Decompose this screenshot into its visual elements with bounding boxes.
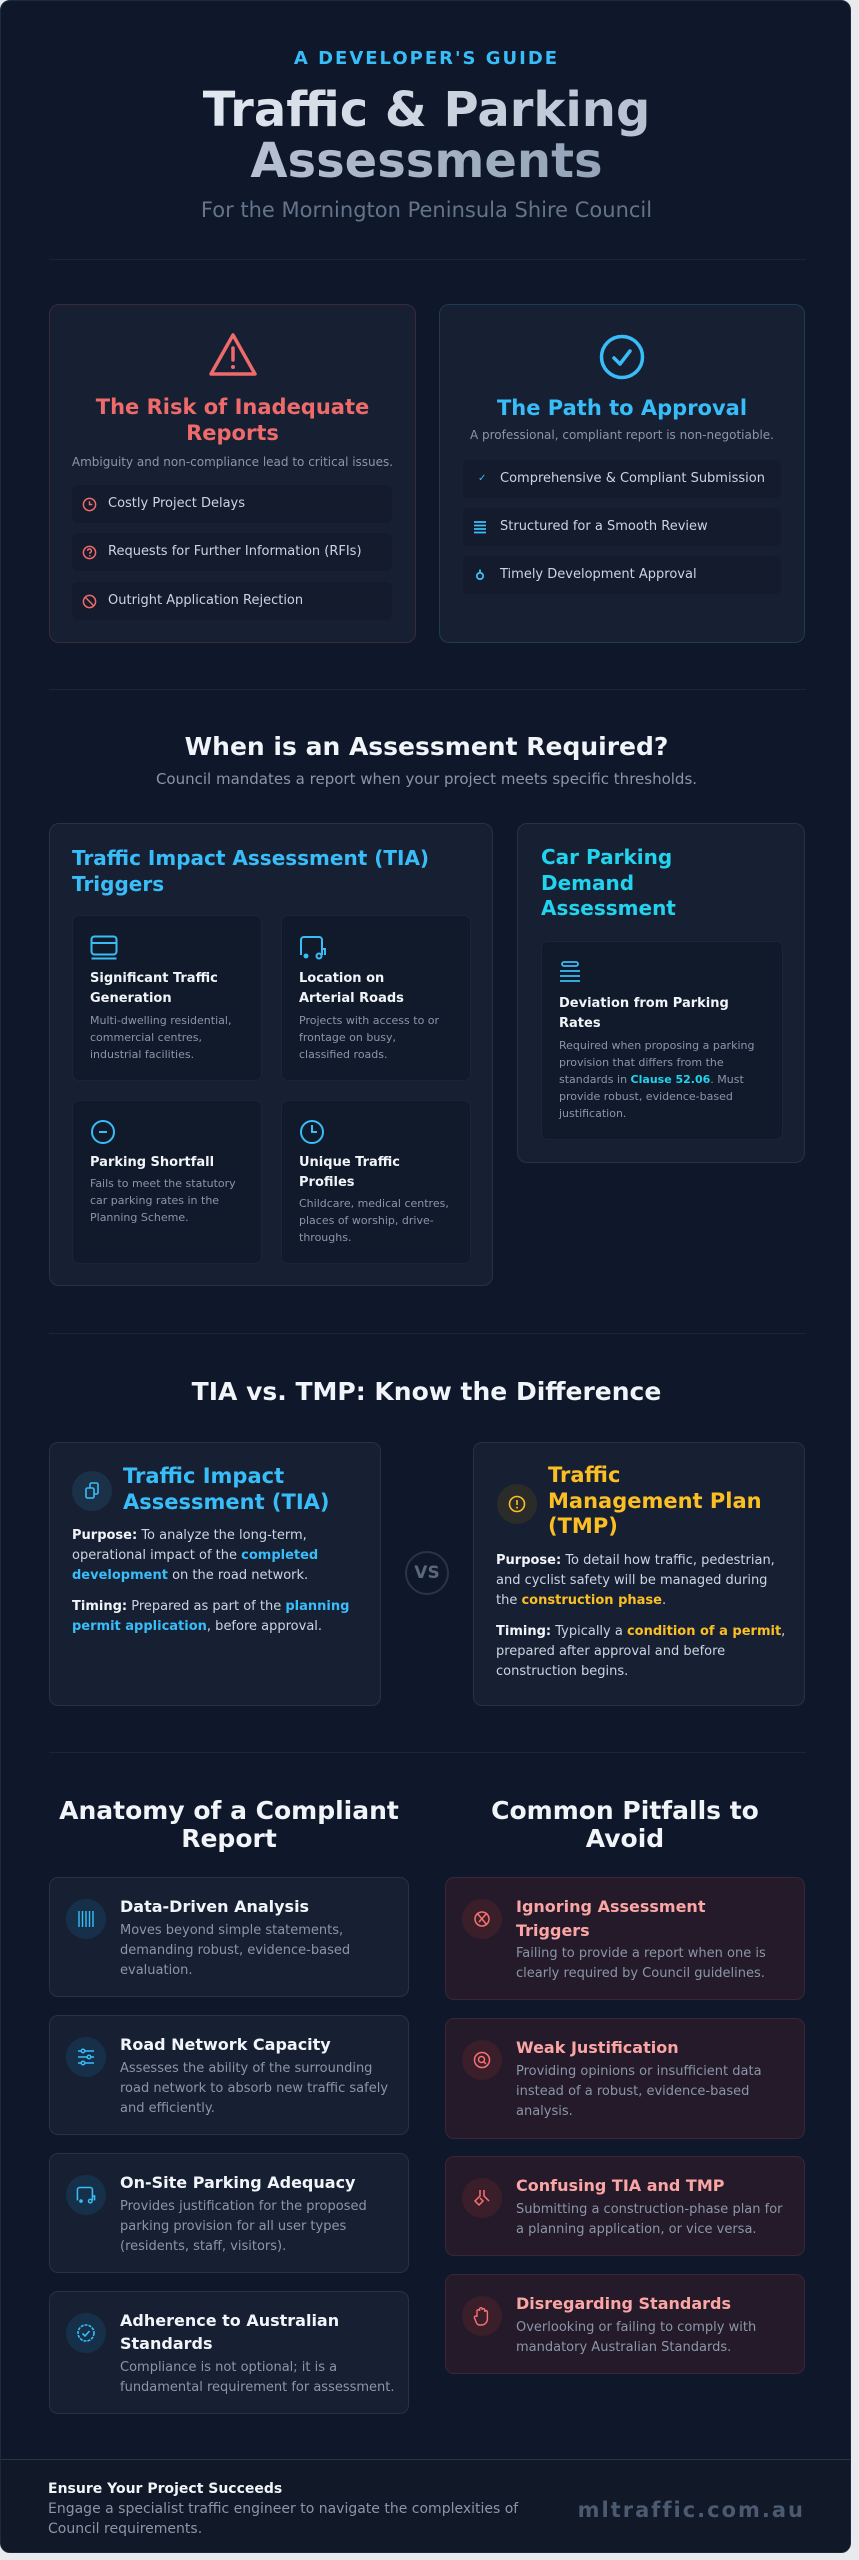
heading: car parking demand: Assessment [541,896,676,920]
card: parking shortfall: car parking rates in the [90,1194,219,1207]
card: deviation from parking rates: Required when proposing a parking [559,1039,754,1052]
card: unique traffic profiles [281,1100,471,1264]
heading: pitfalls: Common Pitfalls to [491,1796,759,1825]
list item: delays [72,485,392,523]
card: significant traffic generation: Significant Traffic [90,971,218,986]
pitfall: weak justification: instead of a robust, evidence-based [516,2084,749,2099]
heading: TMP: (TMP) [548,1514,618,1538]
card: deviation from parking rates: justification. [559,1107,626,1120]
heading: TMP: Traffic [548,1463,620,1487]
footer [1,2459,852,2555]
panel: risk of inadequate reports [49,304,416,643]
card: australian standards: Adherence to Australian [120,2311,339,2330]
icon: window [90,936,118,960]
icon: vehicle [300,936,326,960]
header: title: Assessments [250,133,603,189]
icon: crossed circle [462,1899,502,1939]
heading: pitfalls [491,1796,759,1853]
header: title: Traffic & Parking [203,82,650,138]
heading: TMP: Management Plan [548,1488,762,1512]
card: deviation from parking rates: Rates [559,1016,601,1031]
heading: anatomy: Anatomy of a Compliant [59,1796,399,1825]
list item: submission: Comprehensive & Compliant Submission [500,471,765,486]
card: australian standards: Compliance is not optional; it is a [120,2360,337,2375]
header: title [203,82,650,189]
card: deviation from parking rates: provision that differs from the [559,1056,724,1069]
card: deviation from parking rates: standards in Clause 52.06. Must [559,1073,744,1086]
card: australian standards: Standards [120,2334,212,2353]
card: data-driven analysis [49,1877,409,1997]
icon: VS circle: VS [414,1563,440,1583]
pitfall: weak justification [445,2018,805,2139]
card: data-driven analysis: evaluation. [120,1963,193,1978]
pitfall: weak justification: Providing opinions or insufficient data [516,2064,762,2079]
pitfall: ignoring triggers [445,1877,805,2000]
card: on-site parking adequacy [49,2153,409,2273]
card: on-site parking adequacy: (residents, staff, visitors). [120,2239,286,2254]
card: road network capacity: Road Network Capacity [120,2035,331,2054]
heading: TIA [123,1464,330,1514]
text: TIA purpose: Purpose: To analyze the long-term, operational impact of the completed development on the road network. [72,1528,318,1583]
card: on-site parking adequacy: parking provision for all user types [120,2219,346,2234]
icon: TIA badge [72,1471,112,1511]
pitfall: ignoring triggers: Triggers [516,1921,590,1940]
list item: rejection [72,582,392,620]
icon: search [462,2040,502,2080]
pitfall: confusing TIA and TMP: Submitting a construction-phase plan for [516,2202,783,2217]
heading: risk [96,395,369,445]
card: data-driven analysis: demanding robust, evidence-based [120,1943,350,1958]
list item: approval [463,556,781,594]
card: deviation from parking rates: Deviation from Parking [559,996,729,1011]
card: arterial roads: Projects with access to or [299,1014,439,1027]
text: path subtitle: A professional, compliant report is non-negotiable. [470,428,774,442]
panel: TIA comparison [49,1442,381,1706]
card: significant traffic generation [72,915,262,1081]
card: significant traffic generation: commercial centres, [90,1031,202,1044]
icon: barcode [66,1899,106,1939]
heading: anatomy: Report [181,1824,277,1853]
heading: when is an assessment required: When is an Assessment Required? [185,732,668,761]
icon: vehicle [66,2175,106,2215]
heading: car parking demand: Car Parking [541,845,672,869]
panel: TIA triggers [49,823,493,1286]
card: parking shortfall: Parking Shortfall [90,1155,214,1170]
card: on-site parking adequacy: Provides justification for the proposed [120,2199,367,2214]
card: significant traffic generation: Generation [90,991,172,1006]
list item: delays: Costly Project Delays [108,496,245,511]
header: guide label: A DEVELOPER'S GUIDE [294,48,559,69]
icon: VS circle [405,1551,449,1595]
card: arterial roads: frontage on busy, [299,1031,396,1044]
icon: stacked lines [560,961,580,982]
card: significant traffic generation: industrial facilities. [90,1048,194,1061]
footer: text: Engage a specialist traffic engineer to navigate the complexities of Council requirements. [48,2501,518,2537]
icon: clock [300,1120,324,1144]
card: parking shortfall: Planning Scheme. [90,1211,189,1224]
card: data-driven analysis: Moves beyond simple statements, [120,1923,343,1938]
pitfall: confusing TIA and TMP: a planning application, or vice versa. [516,2222,757,2237]
icon: hand [462,2296,502,2336]
heading: TIA: Traffic Impact [123,1464,284,1488]
card: arterial roads [281,915,471,1081]
footer: website: mltraffic.com.au [578,2498,805,2522]
heading: TIA vs TMP: TIA vs. TMP: Know the Difference [192,1377,661,1406]
list item: review [463,508,781,546]
heading: path: The Path to Approval [497,396,747,420]
card: arterial roads: classified roads. [299,1048,388,1061]
pitfall: ignoring triggers: Ignoring Assessment [516,1897,705,1916]
card: unique traffic profiles: Profiles [299,1175,355,1190]
footer: heading: Ensure Your Project Succeeds [48,2481,282,2497]
heading: anatomy [59,1796,399,1853]
heading: TIA triggers: Traffic Impact Assessment (TIA) [72,846,429,870]
card: significant traffic generation: Multi-dwelling residential, [90,1014,231,1027]
card: data-driven analysis: Data-Driven Analysis [120,1897,309,1916]
list item: RFIs: Requests for Further Information (RFIs) [108,544,362,559]
panel: TMP comparison [473,1442,805,1706]
heading: risk: The Risk of Inadequate [96,395,369,419]
heading: TIA triggers: Triggers [72,872,164,896]
pitfall: ignoring triggers: clearly required by Council guidelines. [516,1966,765,1981]
card: road network capacity: road network to absorb new traffic safely [120,2081,388,2096]
icon: warning triangle [209,333,257,376]
card: arterial roads: Arterial Roads [299,991,404,1006]
card: unique traffic profiles: places of worship, drive- [299,1214,434,1227]
pitfall: confusing TIA and TMP: Confusing TIA and TMP [516,2176,724,2195]
card: unique traffic profiles: Unique Traffic [299,1155,400,1170]
card: road network capacity: Assesses the ability of the surrounding [120,2061,372,2076]
list item: submission: ✓ [478,473,486,484]
heading: TIA: Assessment (TIA) [123,1490,330,1514]
heading: car parking demand: Demand [541,870,634,894]
text: TMP purpose: Purpose: To detail how traffic, pedestrian, and cyclist safety will be managed during the construction phase. [496,1553,775,1608]
panel: path to approval [439,304,805,643]
text: risk subtitle: Ambiguity and non-compliance lead to critical issues. [72,455,393,469]
card: parking shortfall: Fails to meet the statutory [90,1177,236,1190]
pitfall: ignoring triggers: Failing to provide a report when one is [516,1946,766,1961]
card: australian standards: fundamental requirement for assessment. [120,2380,395,2395]
icon: sliders [66,2037,106,2077]
pitfall: disregarding standards: Disregarding Standards [516,2294,731,2313]
card: road network capacity: and efficiently. [120,2101,215,2116]
list item: RFIs [72,533,392,571]
card: australian standards [49,2291,409,2414]
card: road network capacity [49,2015,409,2135]
icon: TMP badge [497,1484,537,1524]
pitfall: confusing TIA and TMP [445,2156,805,2256]
card: on-site parking adequacy: On-Site Parking Adequacy [120,2173,355,2192]
list item: review: Structured for a Smooth Review [500,519,708,534]
icon: badge check [66,2313,106,2353]
text: TIA timing: Timing: Prepared as part of the planning permit application, before approval. [72,1599,349,1634]
card: unique traffic profiles: Childcare, medical centres, [299,1197,449,1210]
heading: pitfalls: Avoid [586,1824,664,1853]
icon: check circle [600,334,644,380]
card: deviation from parking rates [541,941,783,1140]
pitfall: weak justification: Weak Justification [516,2038,679,2057]
heading: TIA triggers [72,846,429,896]
icon: minus circle [91,1120,115,1144]
pitfall: weak justification: analysis. [516,2104,573,2119]
pitfall: disregarding standards [445,2274,805,2374]
heading: risk: Reports [186,421,279,445]
card: deviation from parking rates: provide robust, evidence-based [559,1090,733,1103]
pitfall: disregarding standards: Overlooking or failing to comply with [516,2320,756,2335]
heading: car parking demand [541,845,676,920]
list item: rejection: Outright Application Rejection [108,593,303,608]
panel: car parking demand assessment [517,823,805,1163]
header: subtitle: For the Mornington Peninsula Shire Council [201,198,652,222]
card: arterial roads: Location on [299,971,384,986]
icon: split arrows [462,2178,502,2218]
text: section subtitle: Council mandates a report when your project meets specific thresholds. [156,770,697,788]
list item: submission [463,460,781,498]
card: unique traffic profiles: throughs. [299,1231,351,1244]
list item: approval: Timely Development Approval [500,567,697,582]
heading: TMP [548,1463,762,1538]
card: parking shortfall [72,1100,262,1264]
pitfall: disregarding standards: mandatory Australian Standards. [516,2340,731,2355]
text: TMP timing: Timing: Typically a condition of a permit, prepared after approval and before construction begins. [496,1624,785,1679]
